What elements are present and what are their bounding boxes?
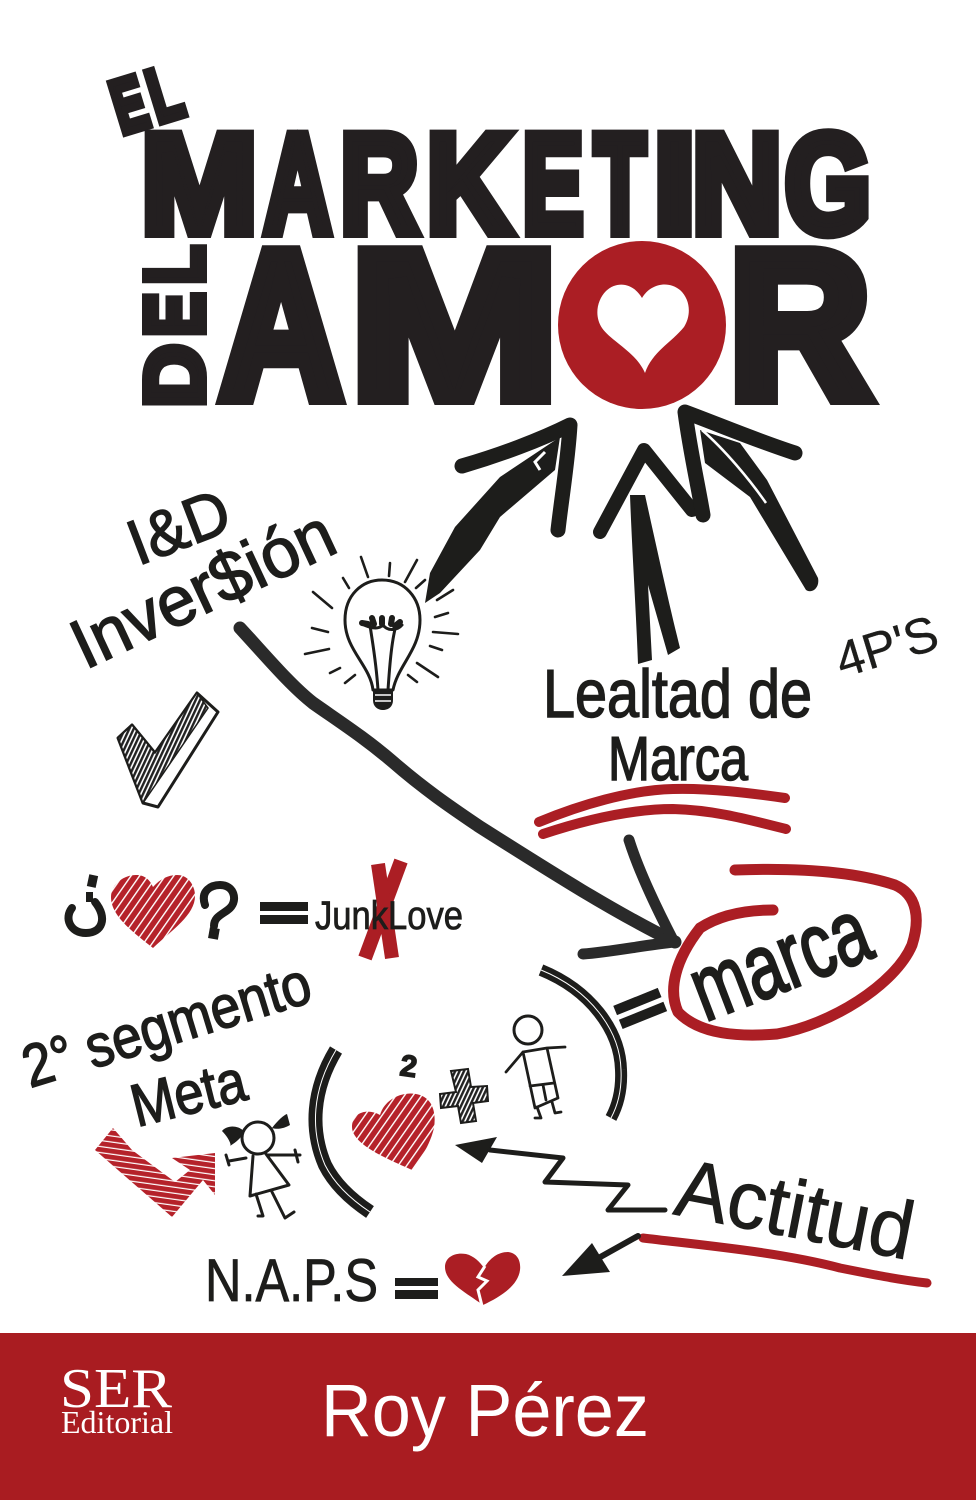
title word: EL: E [102,60,157,149]
text: Lealtad de: Lealtad de [543,656,812,732]
red O with white heart [558,241,726,409]
title word: MARKETING: R [340,105,418,262]
right parenthesis [541,970,621,1118]
red underline: Lealtad de Marca [539,789,786,834]
arrow: Actitud to broken heart [562,1236,638,1276]
text: N.A.P.S: N.A.P.S [205,1247,378,1314]
title word: MARKETING: I [654,105,695,262]
arrow: lightning from Actitud to heart [455,1137,665,1210]
title word: MARKETING: E [523,105,583,262]
title word: DEL: L [128,245,221,284]
question mark [204,885,234,940]
title word: AMOR [220,209,870,442]
equation: heart question equals Junk Love [68,861,463,958]
title word: DEL: E [128,293,221,337]
publisher logo: SER Editorial [60,1358,173,1440]
title word: MARKETING: T [594,105,646,262]
title word: MARKETING: A [264,105,331,262]
publisher logo: SER Editorial: Editorial [61,1404,173,1440]
title word: DEL [128,245,221,407]
title word: MARKETING: K [427,105,511,262]
footer band [0,1333,976,1500]
text: Junk Love: JunkLove [315,894,463,938]
title word: MARKETING: N [692,105,782,262]
author name: Roy Pérez [321,1369,649,1452]
title [102,49,871,442]
icon: boy figure [506,1016,565,1118]
red X [365,861,401,958]
text: 4P'S: 4P'S [829,605,945,689]
arrow: middle, to heart [600,450,692,664]
icon: plus sign [440,1069,488,1123]
icon: girl figure [222,1114,300,1218]
arrow: left, to heart [425,425,570,603]
text: 2° segmento: 2° segmento [14,949,319,1100]
title word: EL: L [138,49,192,138]
text: I&D: I&D [117,475,240,579]
text: Inversión: Inver$ión [58,494,347,684]
icon: broken heart [445,1252,520,1306]
arrow: right, to heart [685,412,818,591]
arrow: inversion to marca [240,628,675,954]
text: superscript 2: 2 [398,1049,419,1084]
title word: AMOR: M [350,209,558,442]
title word: MARKETING: M [141,105,257,262]
title word: MARKETING [141,105,871,262]
equals sign [260,902,308,924]
text: Actitud: Actitud [669,1142,922,1277]
title word: AMOR: A [220,209,342,442]
title word: MARKETING: G [785,105,871,262]
icon: check mark [118,693,218,807]
icon: red heart squared [352,1094,435,1170]
publisher logo: SER Editorial: SER [60,1358,173,1420]
icon: scribbled heart [111,875,195,948]
title word: AMOR: R [729,209,870,442]
text: Marca: Marca [608,725,748,794]
icon: red scribbled arrow [95,1128,215,1217]
left parenthesis [315,1050,370,1212]
icon: light bulb [305,557,458,710]
equals sign: N.A.P.S [395,1278,438,1299]
inverted question mark [68,874,102,933]
equals sign: marca [613,988,667,1029]
text: marca: marca [676,879,885,1041]
text: Meta: Meta [124,1046,253,1140]
title word: DEL: D [128,344,221,407]
red underline: Actitud [643,1238,927,1283]
red ring around marca [674,869,916,1035]
